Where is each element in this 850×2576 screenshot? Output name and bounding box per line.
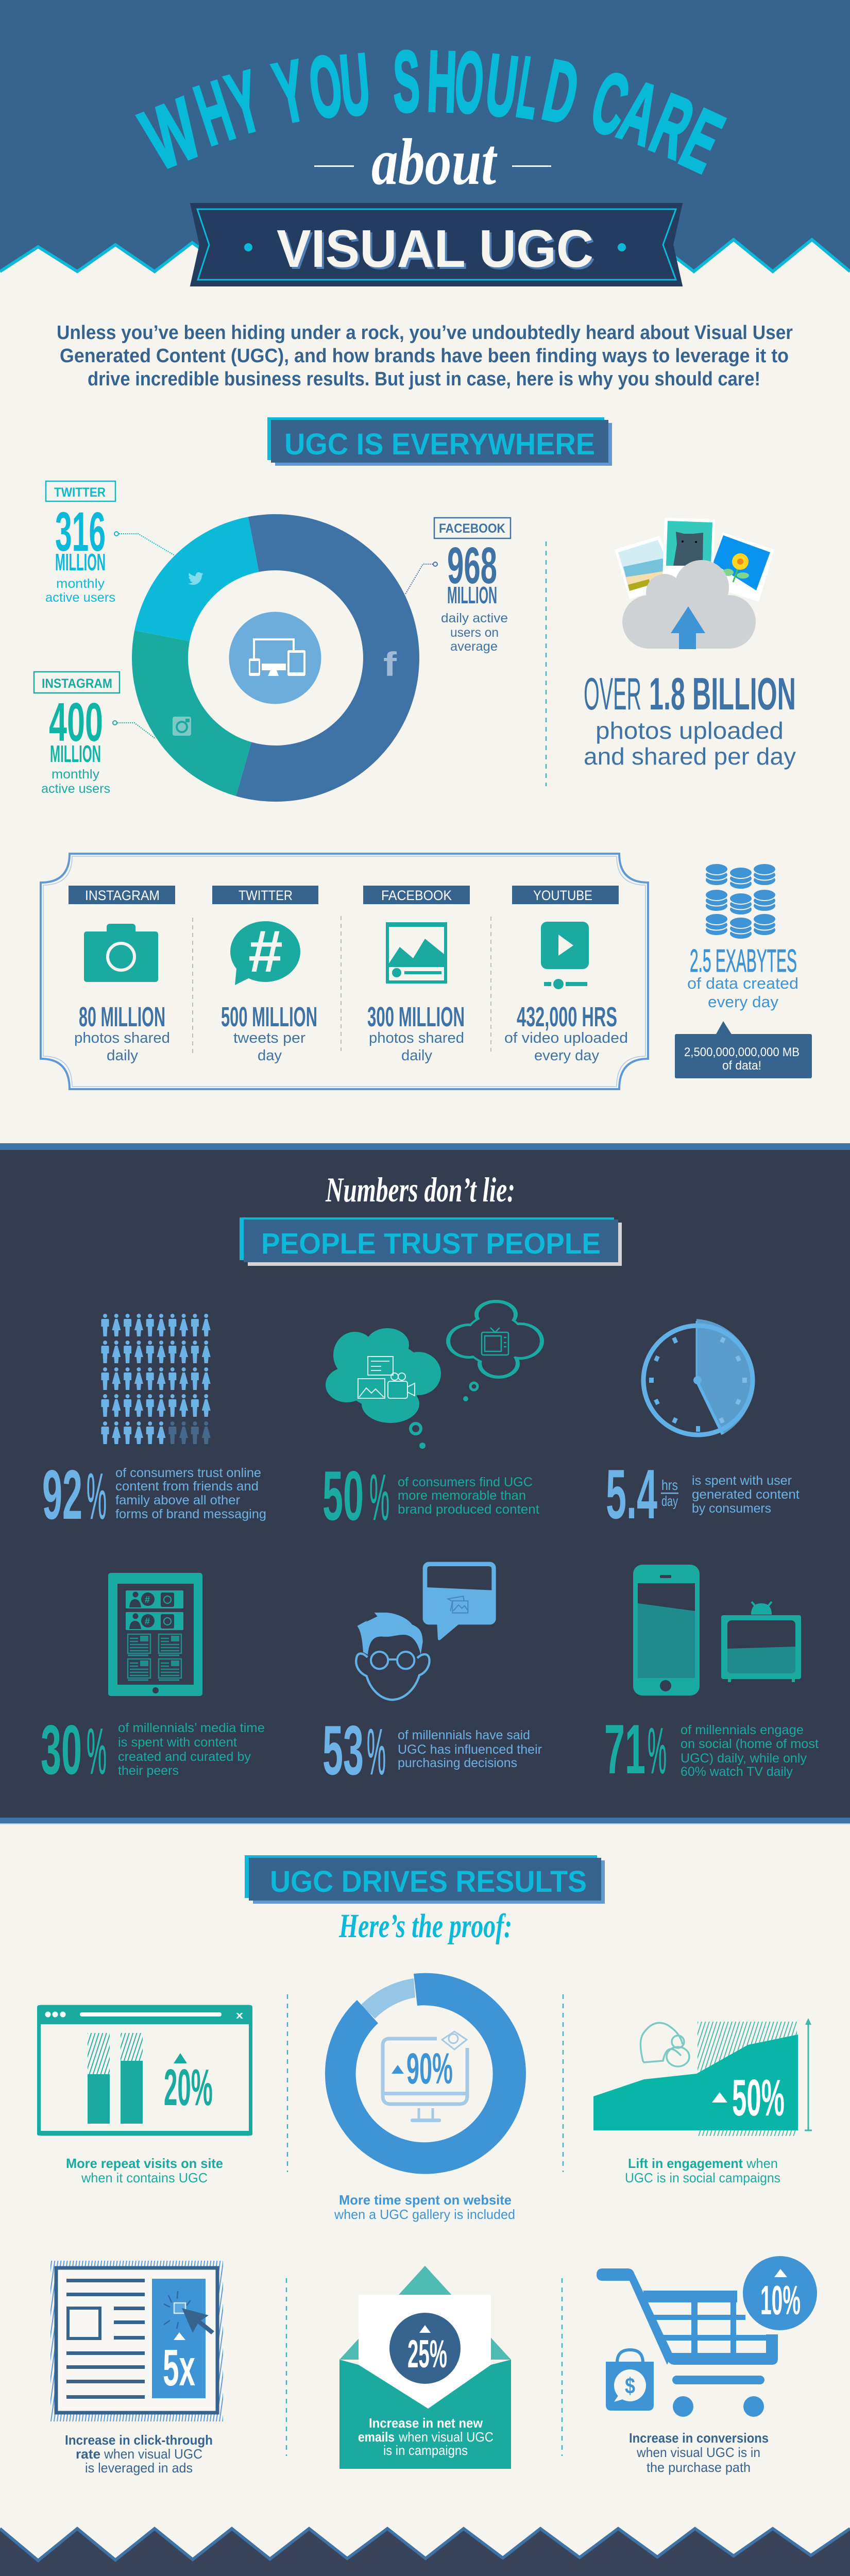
upload arrow xyxy=(671,606,705,649)
caption: repeat visits xyxy=(66,2156,223,2185)
icon: database stacks xyxy=(705,863,776,939)
callout: instagram: active users xyxy=(41,782,110,796)
stat: 5.4 hrs per day xyxy=(606,1455,800,1533)
stat: 92 percent xyxy=(42,1455,266,1534)
stat: 92 percent: content from friends and xyxy=(115,1479,259,1494)
callout: facebook: FACEBOOK xyxy=(439,521,505,536)
envelope caption: when visual UGC xyxy=(398,2429,494,2445)
stat: 53 percent: purchasing decisions xyxy=(398,1756,517,1770)
intro paragraph: Generated Content (UGC), and how brands have been finding ways to leverage it to xyxy=(60,345,789,367)
stat: 50 percent xyxy=(322,1456,539,1535)
intro paragraph xyxy=(57,322,793,390)
browser window chart xyxy=(37,2005,252,2136)
column: twitter: 500 MILLION xyxy=(221,1002,317,1032)
icon: monitor with eye xyxy=(383,2031,467,2122)
stat: over 1.8 billion: photos uploaded xyxy=(596,717,784,744)
intro paragraph: Unless you’ve been hiding under a rock, you’ve undoubtedly heard about Visual User xyxy=(57,322,793,344)
stat: 53 percent: UGC has influenced their xyxy=(398,1742,542,1757)
caption: engagement: when xyxy=(746,2156,778,2171)
stat: 5.4 hrs per day: generated content xyxy=(692,1487,800,1502)
callout: twitter: active users xyxy=(45,590,115,605)
icon: shopping cart xyxy=(597,2268,778,2417)
envelope caption: is in campaigns xyxy=(383,2443,468,2458)
stat: 2.5 exabytes: of data created xyxy=(687,974,798,992)
title: why you should care: H xyxy=(426,32,458,130)
head xyxy=(356,1613,430,1700)
browser window chart: x xyxy=(236,2010,243,2021)
title: why you should care: S xyxy=(393,33,420,130)
icon: picture xyxy=(386,922,447,982)
icon: shopping bag xyxy=(606,2350,654,2411)
badge: 10 percent: 10% xyxy=(760,2277,801,2323)
stat: 5.4 hrs per day: hrs xyxy=(661,1477,678,1493)
caption: conversions: the purchase path xyxy=(647,2460,751,2475)
icon: hashtag bubble: # xyxy=(248,919,283,985)
center circle with device icons xyxy=(229,612,321,704)
column: twitter: TWITTER xyxy=(239,888,293,903)
column: twitter xyxy=(212,886,318,1064)
column: youtube: 432,000 HRS xyxy=(517,1002,617,1032)
callout: facebook: daily active xyxy=(441,611,508,625)
caption: conversions: when visual UGC is in xyxy=(636,2445,760,2460)
panel: footer xyxy=(0,2529,850,2576)
caption: click through xyxy=(65,2432,213,2476)
icon: phone and tv xyxy=(633,1565,801,1696)
footer background xyxy=(0,2529,850,2576)
callout: instagram: MILLION xyxy=(50,740,101,767)
donut segment: twitter xyxy=(134,517,259,641)
stat: 5.4 hrs per day: day xyxy=(661,1493,678,1509)
callout: twitter: TWITTER xyxy=(54,485,106,500)
title: why you should care: O xyxy=(303,37,348,137)
icon: click burst xyxy=(164,2291,191,2329)
stat: over 1.8 billion: OVER xyxy=(584,668,641,719)
stat: 71 percent: on social (home of most xyxy=(681,1737,819,1751)
callout: megabytes xyxy=(675,1021,812,1078)
caption: click through: Increase in click-through xyxy=(65,2432,213,2448)
heading: ugc is everywhere: UGC IS EVERYWHERE xyxy=(284,428,595,461)
caption: engagement: Lift in engagement xyxy=(628,2156,743,2171)
callout: facebook: 968 xyxy=(447,537,497,595)
title: why you should care: U xyxy=(336,35,373,134)
donut: time on website: 90% xyxy=(406,2044,453,2093)
caption: conversions xyxy=(629,2430,769,2475)
caption: click through: rate xyxy=(76,2446,100,2462)
stat: 5.4 hrs per day: 5.4 xyxy=(606,1455,657,1533)
header blue background xyxy=(0,0,850,272)
caption: repeat visits: More repeat visits on site xyxy=(66,2156,223,2171)
title: why you should care: Y xyxy=(267,42,314,142)
stat: 50 percent: of consumers find UGC xyxy=(398,1475,533,1489)
cloud: filled teal xyxy=(326,1328,441,1449)
icon: ad page xyxy=(50,2261,223,2421)
stat: 30 percent: created and curated by xyxy=(118,1750,251,1764)
envelope caption: emails xyxy=(358,2429,395,2445)
title: why you should care: A xyxy=(608,62,671,164)
column: instagram xyxy=(69,886,175,1064)
panel: content per day ticket xyxy=(41,854,648,1089)
column: facebook: FACEBOOK xyxy=(381,888,452,903)
icon: twitter bird xyxy=(188,572,203,585)
badge: 10 percent xyxy=(743,2256,817,2330)
callout: instagram xyxy=(34,672,156,796)
callout: facebook: average xyxy=(450,639,498,654)
photo: sunflower xyxy=(709,532,774,602)
heading xyxy=(245,1855,605,1904)
icon: person with glasses and speech bubble xyxy=(356,1562,496,1700)
icon: facebook f: f xyxy=(383,645,397,683)
panel: ugc drives results xyxy=(37,1855,817,2476)
callout: instagram: INSTAGRAM xyxy=(42,676,112,691)
callout: twitter: MILLION xyxy=(55,549,106,575)
panel: people trust people xyxy=(0,1143,850,1824)
stat: 53 percent: % xyxy=(367,1716,386,1788)
stat: 92 percent: forms of brand messaging xyxy=(115,1507,266,1521)
icon: hashtag bubble xyxy=(230,919,300,985)
ribbon: visual ugc xyxy=(191,204,682,286)
heading: ugc is everywhere xyxy=(267,417,612,466)
title: why you should care: H xyxy=(185,62,244,164)
envelope caption xyxy=(358,2415,494,2458)
title: why you should care: Y xyxy=(218,53,271,154)
stat: 71 percent: % xyxy=(648,1715,667,1787)
title: why you should care: L xyxy=(512,38,546,137)
title: why you should care xyxy=(129,32,736,191)
caption: time spent: More time spent on website xyxy=(339,2192,512,2208)
ribbon: visual ugc: VISUAL UGC xyxy=(279,221,596,280)
title: why you should care: R xyxy=(639,76,705,177)
caption: click through: when visual UGC xyxy=(104,2446,202,2462)
stat: 30 percent xyxy=(41,1710,265,1789)
icon: clock xyxy=(643,1319,754,1435)
stat: 30 percent: their peers xyxy=(118,1764,179,1778)
callout: instagram: 400 xyxy=(49,692,103,753)
callout: twitter: monthly xyxy=(56,577,105,591)
intro paragraph: drive incredible business results. But just in case, here is why you should care! xyxy=(88,368,760,390)
stat: 2.5 exabytes: every day xyxy=(708,993,779,1011)
icon: email envelope xyxy=(339,2266,511,2469)
icon: camera xyxy=(84,924,158,982)
caption: click through: is leveraged in ads xyxy=(85,2460,193,2476)
phone xyxy=(633,1565,700,1696)
caption: engagement: UGC is in social campaigns xyxy=(625,2170,780,2185)
ribbon: visual ugc: VISUAL UGC xyxy=(277,219,593,278)
stat: 53 percent: 53 xyxy=(322,1711,364,1789)
column: facebook xyxy=(363,886,470,1064)
column: instagram: photos shared xyxy=(74,1030,170,1046)
chart: social donut xyxy=(132,514,419,802)
icon: ad page: 5x xyxy=(163,2339,195,2397)
stat: 92 percent: % xyxy=(87,1460,107,1533)
envelope caption: Increase in net new xyxy=(369,2415,483,2431)
stat: 71 percent: 71 xyxy=(604,1710,645,1788)
column: instagram: daily xyxy=(107,1047,138,1064)
photo: beach xyxy=(615,536,680,599)
tv xyxy=(721,1602,801,1682)
stat: 5.4 hrs per day: by consumers xyxy=(692,1501,771,1516)
heading: PEOPLE TRUST PEOPLE xyxy=(261,1227,601,1260)
stat: 50 percent: brand produced content xyxy=(398,1502,539,1517)
column: youtube: of video uploaded xyxy=(504,1030,628,1046)
callout: facebook xyxy=(405,518,511,654)
column: twitter: day xyxy=(258,1047,282,1064)
stat: 71 percent: UGC) daily, while only xyxy=(681,1751,807,1766)
column: facebook: 300 MILLION xyxy=(367,1002,465,1032)
stat: over 1.8 billion: and shared per day xyxy=(584,743,796,770)
icon: people grid 92 percent xyxy=(101,1314,211,1444)
area chart: engagement lift xyxy=(593,2018,812,2136)
stat: 53 percent xyxy=(322,1711,542,1789)
cloud: outlined teal xyxy=(446,1300,544,1379)
callout: facebook: MILLION xyxy=(447,582,497,608)
icon: tablet xyxy=(108,1573,202,1696)
heading xyxy=(240,1217,622,1266)
stat: 50 percent: % xyxy=(369,1461,389,1534)
about script with side dashes xyxy=(314,125,551,198)
icon: video player xyxy=(541,922,589,989)
title: why you should care: O xyxy=(452,33,487,132)
stat: 71 percent: of millennials engage xyxy=(681,1723,804,1737)
title: why you should care: U xyxy=(481,36,522,135)
stat: 30 percent: is spent with content xyxy=(118,1735,237,1750)
stat: 92 percent: family above all other xyxy=(115,1493,240,1507)
title: why you should care: D xyxy=(536,42,586,143)
donut: time on website xyxy=(325,1973,526,2174)
caption: conversions: Increase in conversions xyxy=(629,2430,769,2446)
stat: 92 percent: of consumers trust online xyxy=(115,1466,261,1480)
column: youtube: YOUTUBE xyxy=(533,888,592,903)
about script with side dashes: about xyxy=(371,125,498,198)
stat: over 1.8 billion xyxy=(584,668,796,770)
callout: megabytes: 2,500,000,000,000 MB xyxy=(684,1045,800,1059)
title: why you should care: W xyxy=(129,79,213,189)
column: instagram: INSTAGRAM xyxy=(85,888,160,903)
stat: 30 percent: of millennials’ media time xyxy=(118,1721,265,1735)
icon: shopping bag: $ xyxy=(625,2374,635,2399)
icon: email envelope: 25% xyxy=(407,2332,447,2376)
photo: cat xyxy=(662,518,715,580)
icon: photos and upload cloud xyxy=(615,518,774,649)
panel: header xyxy=(0,0,850,286)
column: youtube xyxy=(504,886,628,1064)
stat: 5.4 hrs per day: is spent with user xyxy=(692,1473,792,1488)
callout: twitter xyxy=(45,481,175,605)
title: why you should care: E xyxy=(668,91,736,191)
icon: chat and person xyxy=(640,2023,689,2066)
stat: 92 percent: 92 xyxy=(42,1455,82,1534)
caption: time spent: when a UGC gallery is included xyxy=(334,2207,515,2222)
heading: UGC DRIVES RESULTS xyxy=(270,1865,587,1899)
column: youtube: every day xyxy=(534,1047,599,1064)
script subtitle: Here’s the proof: xyxy=(338,1907,512,1945)
callout: megabytes: of data! xyxy=(722,1059,761,1073)
callout: twitter: 316 xyxy=(55,500,106,563)
stat: 50 percent: 50 xyxy=(322,1456,364,1535)
icon: thought clouds xyxy=(326,1300,544,1449)
stat: 71 percent xyxy=(604,1710,819,1788)
stat: 30 percent: 30 xyxy=(41,1710,82,1789)
area chart: engagement lift: 50% xyxy=(732,2069,785,2127)
caption: repeat visits: when it contains UGC xyxy=(81,2170,208,2185)
column: facebook: daily xyxy=(401,1047,432,1064)
dark section background xyxy=(0,1143,850,1824)
caption: engagement xyxy=(625,2156,780,2185)
stat: 71 percent: 60% watch TV daily xyxy=(681,1765,793,1779)
cloud xyxy=(622,560,756,649)
callout: facebook: users on xyxy=(450,625,499,640)
column: twitter: tweets per xyxy=(233,1030,305,1046)
donut segment: facebook xyxy=(236,514,419,802)
title: why you should care: C xyxy=(582,54,638,155)
browser window chart: 20% xyxy=(164,2059,213,2116)
stat: 53 percent: of millennials have said xyxy=(398,1728,530,1742)
ticket frame xyxy=(41,854,648,1089)
callout: instagram: monthly xyxy=(52,767,100,782)
speech bubble xyxy=(423,1562,496,1640)
stat: 30 percent: % xyxy=(87,1715,107,1788)
caption: time spent xyxy=(334,2192,515,2222)
stat: 2.5 exabytes xyxy=(687,943,798,1011)
donut segment: instagram xyxy=(132,631,251,796)
column: instagram: 80 MILLION xyxy=(79,1002,165,1032)
icon: instagram xyxy=(173,717,191,736)
script subtitle: Numbers don’t lie: xyxy=(325,1170,515,1209)
stat: 50 percent: more memorable than xyxy=(398,1488,526,1503)
column: facebook: photos shared xyxy=(369,1030,464,1046)
